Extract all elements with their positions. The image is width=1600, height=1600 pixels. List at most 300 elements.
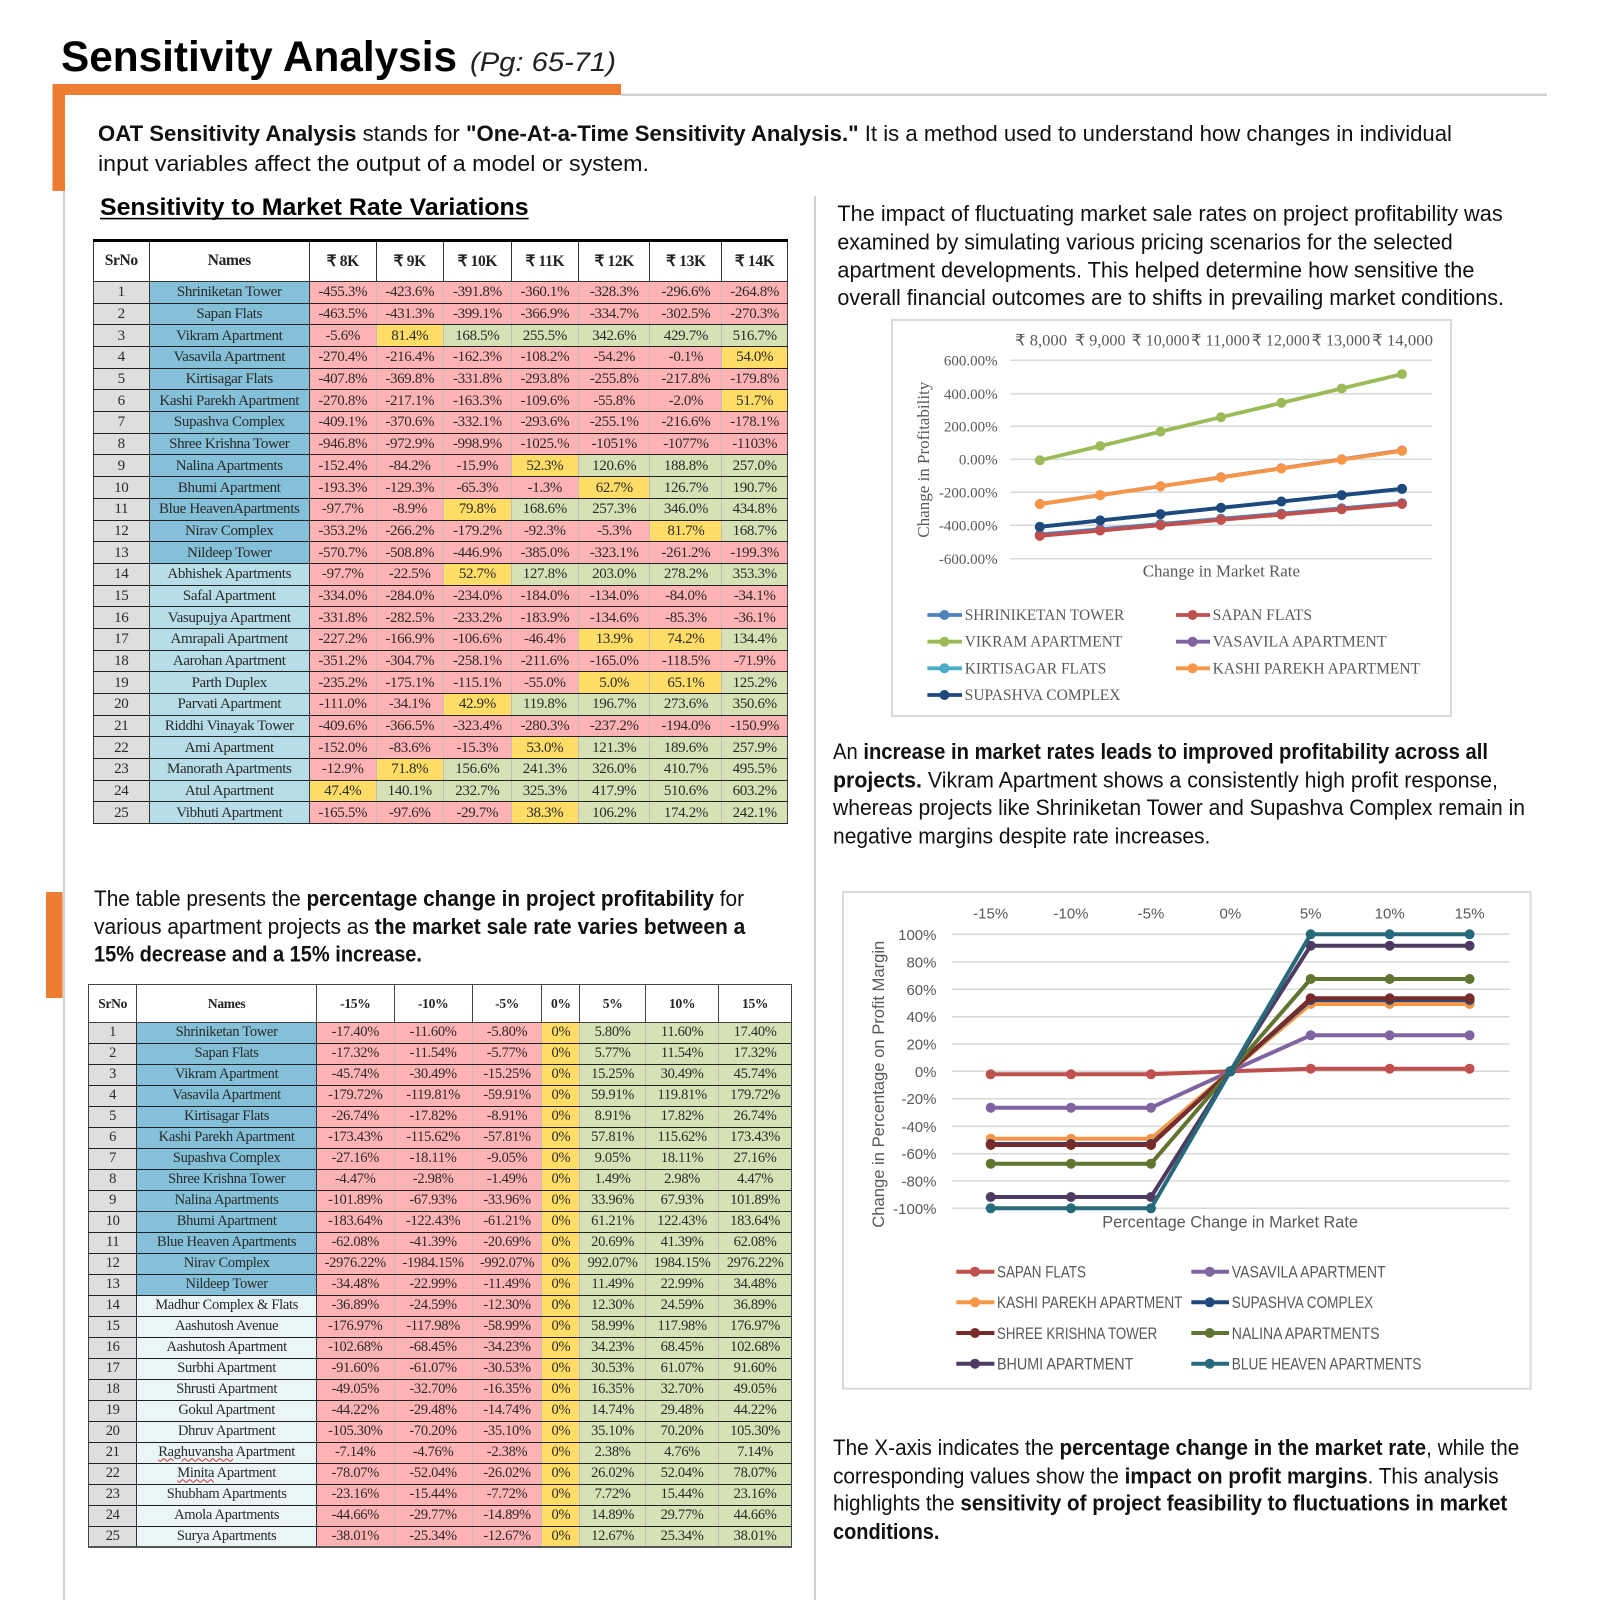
- table: profitability change at market rate -15% to +15%: -78.07%: [332, 1465, 379, 1481]
- table: profitability at market rates 8K to 14K: -328.3%: [590, 284, 639, 300]
- table: profitability change at market rate -15% to +15%: -105.30%: [328, 1423, 382, 1439]
- table: profitability change at market rate -15% to +15%: -44.22%: [332, 1402, 379, 1418]
- table: profitability change at market rate -15% to +15%: Nildeep Tower: [186, 1276, 268, 1292]
- table: profitability change at market rate -15% to +15%: 0%: [552, 1108, 570, 1124]
- table: profitability at market rates 8K to 14K: 495.5%: [733, 761, 777, 777]
- table: profitability change at market rate -15% to +15%: -2976.22%: [325, 1255, 386, 1271]
- text block: increase in market rates: [832, 739, 1525, 848]
- table: profitability at market rates 8K to 14K: 127.8%: [523, 566, 567, 582]
- table: profitability at market rates 8K to 14K: -302.5%: [662, 306, 710, 322]
- table: profitability at market rates 8K to 14K: -163.3%: [453, 393, 502, 409]
- table: profitability at market rates 8K to 14K: 10: [114, 480, 128, 496]
- table: profitability change at market rate -15% to +15%: 70.20%: [661, 1423, 704, 1439]
- data series: [991, 934, 1470, 1208]
- table: profitability at market rates 8K to 14K: 16: [114, 610, 128, 626]
- table: profitability at market rates 8K to 14K: -1051%: [592, 436, 637, 452]
- table: profitability change at market rate -15% to +15%: 35.10%: [591, 1423, 634, 1439]
- table: profitability at market rates 8K to 14K: Vibhuti Apartment: [176, 805, 282, 821]
- y axis labels: -200.00%: [939, 486, 998, 502]
- table: profitability change at market rate -15% to +15%: Minita Apartment: [177, 1465, 276, 1481]
- table: profitability change at market rate -15% to +15%: Aashutosh Apartment: [166, 1339, 287, 1355]
- top axis percentage labels: 10%: [1375, 905, 1405, 922]
- table: profitability at market rates 8K to 14K: -235.2%: [318, 675, 367, 691]
- table: profitability at market rates 8K to 14K: -5.6%: [326, 328, 360, 344]
- table: profitability change at market rate -15% to +15%: -61.21%: [483, 1213, 531, 1229]
- top axis percentage labels: 0%: [1220, 905, 1241, 922]
- table: profitability at market rates 8K to 14K: -165.5%: [318, 805, 367, 821]
- table: profitability at market rates 8K to 14K: 25: [114, 805, 128, 821]
- table: profitability at market rates 8K to 14K: Nirav Complex: [185, 523, 273, 539]
- table: profitability change at market rate -15% to +15%: -16.35%: [483, 1381, 531, 1397]
- table: profitability change at market rate -15% to +15%: -34.48%: [332, 1276, 379, 1292]
- table: profitability change at market rate -15% to +15%: -17.40%: [332, 1024, 379, 1040]
- table: profitability change at market rate -15% to +15%: -5.77%: [487, 1045, 527, 1061]
- table: profitability change at market rate -15% to +15%: Aashutosh Avenue: [175, 1318, 278, 1334]
- table: profitability at market rates 8K to 14K: Sapan Flats: [196, 306, 262, 322]
- table: profitability change at market rate -15% to +15%: 57.81%: [591, 1129, 634, 1145]
- table: profitability change at market rate -15% to +15%: -41.39%: [409, 1234, 457, 1250]
- table: profitability at market rates 8K to 14K: -84.0%: [665, 588, 707, 604]
- table: profitability change at market rate -15% to +15%: -5%: [495, 996, 519, 1011]
- table: profitability at market rates 8K to 14K: Abhishek Apartments: [167, 566, 291, 582]
- table: profitability change at market rate -15% to +15%: 27.16%: [734, 1150, 777, 1166]
- table: profitability at market rates 8K to 14K: -84.2%: [389, 458, 431, 474]
- table: profitability change at market rate -15% to +15%: 1984.15%: [654, 1255, 710, 1271]
- legend: SUPASHVA COMPLEX: [965, 687, 1120, 704]
- table: profitability change at market rate -15% to +15%: -14.74%: [483, 1402, 531, 1418]
- table: profitability at market rates 8K to 14K: -293.6%: [520, 414, 569, 430]
- table: profitability at market rates 8K to 14K: Blue HeavenApartments: [159, 501, 300, 517]
- table: profitability change at market rate -15% to +15%: 176.97%: [730, 1318, 780, 1334]
- table: profitability at market rates 8K to 14K: -455.3%: [318, 284, 367, 300]
- table: profitability change at market rate -15% to +15%: -15%: [340, 996, 370, 1011]
- table: profitability at market rates 8K to 14K: Manorath Apartments: [167, 761, 292, 777]
- top axis price labels: ₹ 9,000: [1075, 333, 1126, 350]
- table: profitability change at market rate -15% to +15%: Shrusti Apartment: [176, 1381, 277, 1397]
- y axis labels: -80%: [901, 1174, 936, 1190]
- table: profitability change at market rate -15% to +15%: 20: [106, 1423, 120, 1439]
- table: profitability change at market rate -15% to +15%: 18.11%: [661, 1150, 703, 1166]
- table: profitability change at market rate -15% to +15%: -30.53%: [483, 1360, 531, 1376]
- table: profitability change at market rate -15% to +15%: -2.98%: [413, 1171, 453, 1187]
- y axis labels: 40%: [906, 1009, 936, 1026]
- table: profitability at market rates 8K to 14K: -36.1%: [734, 610, 775, 626]
- table: profitability at market rates 8K to 14K: 12: [114, 523, 128, 539]
- table: profitability at market rates 8K to 14K: -1025.%: [520, 436, 569, 452]
- table: profitability at market rates 8K to 14K: -152.0%: [318, 740, 367, 756]
- table: profitability at market rates 8K to 14K: 188.8%: [664, 458, 708, 474]
- table: profitability at market rates 8K to 14K: -261.2%: [662, 545, 710, 561]
- table: profitability change at market rate -15% to +15%: -7.72%: [487, 1486, 527, 1502]
- table: profitability at market rates 8K to 14K: Ami Apartment: [185, 740, 274, 756]
- table: profitability change at market rate -15% to +15%: 9: [109, 1192, 116, 1208]
- table: profitability at market rates 8K to 14K: -972.9%: [385, 436, 434, 452]
- table: profitability change at market rate -15% to +15%: -115.62%: [406, 1129, 460, 1145]
- table: profitability at market rates 8K to 14K: 203.0%: [592, 566, 636, 582]
- table: profitability change at market rate -15% to +15%: -34.23%: [483, 1339, 531, 1355]
- table: profitability at market rates 8K to 14K: 257.9%: [733, 740, 777, 756]
- table: profitability at market rates 8K to 14K: -280.3%: [520, 718, 569, 734]
- legend: SUPASHVA COMPLEX: [1232, 1294, 1373, 1312]
- table: profitability at market rates 8K to 14K: -34.1%: [389, 696, 431, 712]
- table: profitability change at market rate -15% to +15%: -117.98%: [406, 1318, 460, 1334]
- text block: impact of market rates: apartment developments. This helped determine how sensitive the: [837, 257, 1474, 282]
- table: profitability change at market rate -15% to +15%: Vasavila Apartment: [172, 1087, 281, 1103]
- table: profitability at market rates 8K to 14K: -184.0%: [520, 588, 569, 604]
- table: profitability at market rates 8K to 14K: 417.9%: [592, 783, 636, 799]
- table: profitability at market rates 8K to 14K: 325.3%: [523, 783, 567, 799]
- heading: market rate variations: Sensitivity to Market Rate Variations: [100, 194, 529, 221]
- top axis price labels: ₹ 13,000: [1312, 333, 1370, 350]
- table: profitability at market rates 8K to 14K: 71.8%: [391, 761, 428, 777]
- table: profitability change at market rate -15% to +15%: 0%: [552, 1339, 570, 1355]
- table: profitability at market rates 8K to 14K: 13: [114, 545, 128, 561]
- top axis price labels: ₹ 10,000: [1132, 333, 1190, 350]
- table: profitability change at market rate -15% to +15%: 16: [106, 1339, 120, 1355]
- table: profitability at market rates 8K to 14K: 17: [114, 631, 128, 647]
- table: profitability at market rates 8K to 14K: -323.1%: [590, 545, 639, 561]
- text block: impact of market rates: overall financial outcomes are to shifts in prevailing market conditions.: [837, 285, 1504, 310]
- legend: KASHI PAREKH APARTMENT: [997, 1294, 1182, 1312]
- table: profitability at market rates 8K to 14K: -97.7%: [322, 566, 364, 582]
- table: profitability at market rates 8K to 14K: -227.2%: [318, 631, 367, 647]
- table: profitability change at market rate -15% to +15%: -12.30%: [483, 1297, 531, 1313]
- table: profitability change at market rate -15% to +15%: -1984.15%: [402, 1255, 464, 1271]
- table: profitability change at market rate -15% to +15%: Vikram Apartment: [175, 1066, 278, 1082]
- intro text block: input variables affect the output of a model or system.: [98, 151, 649, 176]
- table: profitability change at market rate -15% to +15%: -992.07%: [480, 1255, 534, 1271]
- table: profitability change at market rate -15% to +15%: 0%: [552, 1276, 570, 1292]
- table: profitability at market rates 8K to 14K: 6: [118, 393, 125, 409]
- legend: KASHI PAREKH APARTMENT: [1213, 660, 1421, 677]
- table: profitability at market rates 8K to 14K: 603.2%: [733, 783, 777, 799]
- table: profitability change at market rate -15% to +15%: 0%: [552, 1192, 570, 1208]
- table: profitability change at market rate -15% to +15%: 183.64%: [730, 1213, 780, 1229]
- table: profitability at market rates 8K to 14K: -270.4%: [318, 349, 367, 365]
- table: profitability change at market rate -15% to +15%: 7.72%: [595, 1486, 631, 1502]
- table: profitability at market rates 8K to 14K: 5.0%: [599, 675, 629, 691]
- table: profitability at market rates 8K to 14K: -194.0%: [662, 718, 710, 734]
- table: profitability at market rates 8K to 14K: -85.3%: [665, 610, 707, 626]
- intro text block: OAT Sensitivity Analysis stands for "One-At-a-Time Sensitivity Analysis." It is a method used to understand how changes in individual: [98, 121, 1452, 146]
- table: profitability at market rates 8K to 14K: -162.3%: [453, 349, 502, 365]
- y axis labels: 100%: [898, 927, 936, 944]
- table: profitability at market rates 8K to 14K: -296.6%: [662, 284, 710, 300]
- table: profitability change at market rate -15% to +15%: 0%: [552, 1381, 570, 1397]
- table: profitability at market rates 8K to 14K: 174.2%: [664, 805, 708, 821]
- table: profitability at market rates 8K to 14K: -199.3%: [730, 545, 779, 561]
- table: profitability change at market rate -15% to +15%: -57.81%: [483, 1129, 531, 1145]
- table: profitability change at market rate -15% to +15%: -70.20%: [409, 1423, 457, 1439]
- table: profitability at market rates 8K to 14K: 62.7%: [596, 480, 633, 496]
- table: profitability change at market rate -15% to +15%: 10%: [669, 996, 695, 1011]
- table: profitability at market rates 8K to 14K: 52.3%: [526, 458, 563, 474]
- table: profitability change at market rate -15% to +15%: 0%: [552, 1213, 570, 1229]
- table: profitability change at market rate -15% to +15%: Supashva Complex: [173, 1150, 280, 1166]
- table: profitability at market rates 8K to 14K: -431.3%: [385, 306, 434, 322]
- y axis labels: 80%: [906, 954, 936, 972]
- table: profitability change at market rate -15% to +15%: Surya Apartments: [177, 1528, 276, 1544]
- table: profitability at market rates 8K to 14K: 52.7%: [459, 566, 496, 582]
- table: profitability at market rates 8K to 14K: -179.8%: [730, 371, 779, 387]
- table: profitability change at market rate -15% to +15%: 0%: [552, 1150, 570, 1166]
- orange accent bar: [46, 892, 63, 998]
- table: profitability change at market rate -15% to +15%: 23: [106, 1486, 120, 1502]
- table: profitability change at market rate -15% to +15%: 102.68%: [730, 1339, 780, 1355]
- table: profitability change at market rate -15% to +15%: -27.16%: [332, 1150, 379, 1166]
- table: profitability at market rates 8K to 14K: 119.8%: [523, 696, 567, 712]
- table: profitability at market rates 8K to 14K: 134.4%: [733, 631, 777, 647]
- table: profitability change at market rate -15% to +15%: -15.44%: [409, 1486, 457, 1502]
- table: profitability change at market rate -15% to +15%: 2976.22%: [727, 1255, 784, 1271]
- text block: table explanation: The table presents the percentage change in project profitability for: [94, 886, 744, 911]
- grid lines: [952, 934, 1510, 1208]
- table: profitability at market rates 8K to 14K: 14: [114, 566, 128, 582]
- text block: table explanation: 15% decrease and a 15% increase.: [94, 942, 422, 967]
- table: profitability change at market rate -15% to +15%: 20.69%: [591, 1234, 634, 1250]
- table: profitability at market rates 8K to 14K: -258.1%: [453, 653, 502, 669]
- table: profitability at market rates 8K to 14K: Parth Duplex: [192, 675, 267, 691]
- table: profitability change at market rate -15% to +15%: 14.89%: [591, 1507, 634, 1523]
- table: profitability at market rates 8K to 14K: -304.7%: [385, 653, 434, 669]
- table: profitability at market rates 8K to 14K: -97.7%: [322, 501, 364, 517]
- y axis labels: [893, 927, 936, 1218]
- table: profitability at market rates 8K to 14K: -34.1%: [734, 588, 775, 604]
- table: profitability at market rates 8K to 14K: 434.8%: [733, 501, 777, 517]
- table: profitability change at market rate -15% to +15%: Amola Apartments: [174, 1507, 279, 1523]
- table: profitability change at market rate -15% to +15%: 117.98%: [657, 1318, 707, 1334]
- table: profitability change at market rate -15% to +15%: -176.97%: [328, 1318, 382, 1334]
- table: profitability change at market rate -15% to +15%: [88, 984, 792, 1548]
- title: (Pg: 65-71): [470, 47, 616, 77]
- table: profitability at market rates 8K to 14K: -332.1%: [453, 414, 502, 430]
- table: profitability at market rates 8K to 14K: -370.6%: [385, 414, 434, 430]
- table: profitability change at market rate -15% to +15%: 15%: [742, 996, 768, 1011]
- table: profitability change at market rate -15% to +15%: 19: [106, 1402, 120, 1418]
- table: profitability at market rates 8K to 14K: -233.2%: [453, 610, 502, 626]
- table: profitability change at market rate -15% to +15%: 41.39%: [661, 1234, 704, 1250]
- y axis title: Change in Profitability: [914, 381, 933, 538]
- table: profitability change at market rate -15% to +15%: -17.82%: [409, 1108, 457, 1124]
- table: profitability at market rates 8K to 14K: -407.8%: [318, 371, 367, 387]
- table: profitability change at market rate -15% to +15%: 38.01%: [734, 1528, 777, 1544]
- table: profitability change at market rate -15% to +15%: -45.74%: [332, 1066, 379, 1082]
- table: profitability change at market rate -15% to +15%: -11.60%: [410, 1024, 457, 1040]
- table: profitability change at market rate -15% to +15%: 11.60%: [661, 1024, 703, 1040]
- table: profitability change at market rate -15% to +15%: 179.72%: [730, 1087, 780, 1103]
- table: profitability change at market rate -15% to +15%: 44.22%: [734, 1402, 777, 1418]
- table: profitability at market rates 8K to 14K: Riddhi Vinayak Tower: [165, 718, 294, 734]
- table: profitability at market rates 8K to 14K: -1.3%: [528, 480, 562, 496]
- table: profitability change at market rate -15% to +15%: 12: [106, 1255, 120, 1271]
- y axis labels: 600.00%: [944, 354, 998, 370]
- y axis labels: 60%: [906, 982, 936, 999]
- table: profitability change at market rate -15% to +15%: -5.80%: [487, 1024, 527, 1040]
- table: profitability at market rates 8K to 14K: 350.6%: [733, 696, 777, 712]
- table: profitability at market rates 8K to 14K: 342.6%: [592, 328, 636, 344]
- table: profitability at market rates 8K to 14K: -234.0%: [453, 588, 502, 604]
- table: profitability at market rates 8K to 14K: -264.8%: [730, 284, 779, 300]
- legend: KIRTISAGAR FLATS: [965, 660, 1106, 677]
- table: profitability change at market rate -15% to +15%: 34.48%: [734, 1276, 777, 1292]
- table: profitability at market rates 8K to 14K: -152.4%: [318, 458, 367, 474]
- table: profitability at market rates 8K to 14K: 65.1%: [667, 675, 704, 691]
- legend: NALINA APARTMENTS: [1232, 1325, 1380, 1343]
- text block: impact of market rates: [837, 201, 1504, 310]
- table: profitability at market rates 8K to 14K: 53.0%: [526, 740, 563, 756]
- table: profitability change at market rate -15% to +15%: Kirtisagar Flats: [184, 1108, 269, 1124]
- table: profitability at market rates 8K to 14K: 126.7%: [664, 480, 708, 496]
- table: profitability change at market rate -15% to +15%: -12.67%: [483, 1528, 531, 1544]
- top axis percentage labels: [973, 905, 1485, 922]
- table: profitability at market rates 8K to 14K: 3: [118, 328, 125, 344]
- table: profitability change at market rate -15% to +15%: 17.40%: [734, 1024, 777, 1040]
- table: profitability change at market rate -15% to +15%: 105.30%: [730, 1423, 780, 1439]
- table: profitability change at market rate -15% to +15%: -30.49%: [409, 1066, 457, 1082]
- table: profitability at market rates 8K to 14K: 20: [114, 696, 128, 712]
- table: profitability change at market rate -15% to +15%: 0%: [552, 1087, 570, 1103]
- table: profitability at market rates 8K to 14K: 8: [118, 436, 125, 452]
- table: profitability at market rates 8K to 14K: -353.2%: [318, 523, 367, 539]
- table: profitability change at market rate -15% to +15%: 4.47%: [737, 1171, 773, 1187]
- table: profitability change at market rate -15% to +15%: 2.98%: [664, 1171, 700, 1187]
- table: profitability at market rates 8K to 14K: -178.1%: [730, 414, 779, 430]
- line chart: change in profitability vs market rate: [892, 320, 1451, 716]
- table: profitability at market rates 8K to 14K: 11: [114, 501, 128, 517]
- table: profitability at market rates 8K to 14K: 168.7%: [733, 523, 777, 539]
- table: profitability change at market rate -15% to +15%: 0%: [552, 1024, 570, 1040]
- table: profitability change at market rate -15% to +15%: 17: [106, 1360, 120, 1376]
- table: profitability change at market rate -15% to +15%: -11.54%: [410, 1045, 457, 1061]
- table: profitability change at market rate -15% to +15%: 58.99%: [591, 1318, 634, 1334]
- table: profitability change at market rate -15% to +15%: 1: [109, 1024, 116, 1040]
- table: profitability change at market rate -15% to +15%: 17.32%: [734, 1045, 777, 1061]
- legend: SHRINIKETAN TOWER: [965, 607, 1125, 624]
- table: profitability change at market rate -15% to +15%: 49.05%: [734, 1381, 777, 1397]
- table: profitability at market rates 8K to 14K: Shriniketan Tower: [177, 284, 282, 300]
- table: profitability change at market rate -15% to +15%: 30.49%: [661, 1066, 704, 1082]
- table: profitability at market rates 8K to 14K: 74.2%: [667, 631, 704, 647]
- text block: x-axis explanation: corresponding values show the impact on profit margins. This analysis: [833, 1463, 1499, 1488]
- table: profitability at market rates 8K to 14K: -12.9%: [322, 761, 364, 777]
- table: profitability change at market rate -15% to +15%: 11.54%: [661, 1045, 703, 1061]
- table: profitability change at market rate -15% to +15%: Bhumi Apartment: [177, 1213, 277, 1229]
- table: profitability change at market rate -15% to +15%: 3: [109, 1066, 116, 1082]
- table: profitability change at market rate -15% to +15%: -38.01%: [332, 1528, 379, 1544]
- table: profitability at market rates 8K to 14K: ₹ 12K: [594, 253, 634, 270]
- table: profitability change at market rate -15% to +15%: 6: [109, 1129, 116, 1145]
- table: profitability at market rates 8K to 14K: -55.0%: [524, 675, 566, 691]
- table: profitability change at market rate -15% to +15%: 173.43%: [730, 1129, 780, 1145]
- y axis labels: -400.00%: [939, 518, 998, 534]
- table: profitability change at market rate -15% to +15%: 0%: [551, 996, 571, 1011]
- y axis labels: 0.00%: [959, 453, 998, 469]
- table: profitability change at market rate -15% to +15%: -49.05%: [332, 1381, 379, 1397]
- intro text block: [98, 121, 1452, 176]
- table: profitability change at market rate -15% to +15%: 11.49%: [591, 1276, 634, 1292]
- table: profitability change at market rate -15% to +15%: 0%: [552, 1066, 570, 1082]
- data series: [1040, 374, 1402, 536]
- table: profitability change at market rate -15% to +15%: 36.89%: [734, 1297, 777, 1313]
- table: profitability change at market rate -15% to +15%: -10%: [418, 996, 448, 1011]
- table: profitability change at market rate -15% to +15%: -101.89%: [328, 1192, 382, 1208]
- table: profitability change at market rate -15% to +15%: 2: [109, 1045, 116, 1061]
- table: profitability change at market rate -15% to +15%: 4: [109, 1087, 116, 1103]
- table: profitability at market rates 8K to 14K: -998.9%: [453, 436, 502, 452]
- x axis title: Percentage Change in Market Rate: [1102, 1213, 1358, 1232]
- table: profitability change at market rate -15% to +15%: -52.04%: [409, 1465, 457, 1481]
- table: profitability at market rates 8K to 14K: -83.6%: [389, 740, 431, 756]
- table: profitability change at market rate -15% to +15%: -4.76%: [413, 1444, 453, 1460]
- table: profitability change at market rate -15% to +15%: 7: [109, 1150, 116, 1166]
- table: profitability at market rates 8K to 14K: 2: [118, 306, 125, 322]
- table: profitability change at market rate -15% to +15%: 4.76%: [664, 1444, 700, 1460]
- table: profitability at market rates 8K to 14K: -129.3%: [385, 480, 434, 496]
- table: profitability change at market rate -15% to +15%: 115.62%: [657, 1129, 707, 1145]
- table: profitability change at market rate -15% to +15%: -4.47%: [335, 1171, 376, 1187]
- legend: [927, 607, 1421, 704]
- y axis labels: -100%: [893, 1201, 936, 1218]
- table: profitability change at market rate -15% to +15%: 59.91%: [591, 1087, 634, 1103]
- top axis price labels: ₹ 8,000: [1015, 333, 1067, 350]
- table: profitability change at market rate -15% to +15%: -29.77%: [409, 1507, 457, 1523]
- text block: table explanation: various apartment projects as the market sale rate varies between a: [94, 914, 746, 939]
- table: profitability at market rates 8K to 14K: 9: [118, 458, 125, 474]
- table: profitability change at market rate -15% to +15%: 24.59%: [661, 1297, 704, 1313]
- table: profitability change at market rate -15% to +15%: 15.44%: [661, 1486, 704, 1502]
- table: profitability change at market rate -15% to +15%: 15.25%: [591, 1066, 634, 1082]
- table: profitability at market rates 8K to 14K: 353.3%: [733, 566, 777, 582]
- table: profitability change at market rate -15% to +15%: 8: [109, 1171, 116, 1187]
- table: profitability change at market rate -15% to +15%: 1.49%: [595, 1171, 631, 1187]
- table: profitability at market rates 8K to 14K: 257.3%: [592, 501, 636, 517]
- table: profitability at market rates 8K to 14K: Amrapali Apartment: [171, 631, 288, 647]
- table: profitability change at market rate -15% to +15%: Blue Heaven Apartments: [157, 1234, 296, 1250]
- table: profitability at market rates 8K to 14K: -165.0%: [590, 653, 639, 669]
- table: profitability change at market rate -15% to +15%: 17.82%: [661, 1108, 704, 1124]
- table: profitability at market rates 8K to 14K: -508.8%: [385, 545, 434, 561]
- table: profitability at market rates 8K to 14K: -331.8%: [453, 371, 502, 387]
- table: profitability change at market rate -15% to +15%: 44.66%: [734, 1507, 777, 1523]
- table: profitability change at market rate -15% to +15%: 0%: [552, 1171, 570, 1187]
- table: profitability change at market rate -15% to +15%: 0%: [552, 1234, 570, 1250]
- table: profitability at market rates 8K to 14K: -217.1%: [385, 393, 434, 409]
- table: profitability at market rates 8K to 14K: 13.9%: [596, 631, 633, 647]
- top axis price labels: ₹ 11,000: [1191, 333, 1250, 350]
- table: profitability at market rates 8K to 14K: 156.6%: [455, 761, 499, 777]
- table: profitability change at market rate -15% to +15%: -173.43%: [328, 1129, 382, 1145]
- text block: increase in market rates: An increase in market rates leads to improved profitability across all: [833, 739, 1488, 764]
- table: profitability at market rates 8K to 14K: Kashi Parekh Apartment: [159, 393, 299, 409]
- table: profitability change at market rate -15% to +15%: -36.89%: [332, 1297, 379, 1313]
- table: profitability change at market rate -15% to +15%: 0%: [552, 1444, 570, 1460]
- legend: [956, 1264, 1421, 1374]
- table: profitability at market rates 8K to 14K: -409.6%: [318, 718, 367, 734]
- table: profitability change at market rate -15% to +15%: -122.43%: [406, 1213, 460, 1229]
- table: profitability change at market rate -15% to +15%: 12.30%: [591, 1297, 634, 1313]
- table: profitability change at market rate -15% to +15%: 0%: [552, 1465, 570, 1481]
- top axis percentage labels: -10%: [1053, 905, 1089, 922]
- table: profitability change at market rate -15% to +15%: 0%: [552, 1402, 570, 1418]
- table: profitability at market rates 8K to 14K: Vikram Apartment: [176, 328, 282, 344]
- table: profitability at market rates 8K to 14K: 121.3%: [592, 740, 636, 756]
- table: profitability at market rates 8K to 14K: -111.0%: [319, 696, 367, 712]
- table: profitability change at market rate -15% to +15%: 0%: [552, 1129, 570, 1145]
- table: profitability change at market rate -15% to +15%: 25: [106, 1528, 120, 1544]
- table: profitability at market rates 8K to 14K: -166.9%: [385, 631, 434, 647]
- table: profitability at market rates 8K to 14K: -22.5%: [389, 566, 431, 582]
- table: profitability change at market rate -15% to +15%: 24: [106, 1507, 120, 1523]
